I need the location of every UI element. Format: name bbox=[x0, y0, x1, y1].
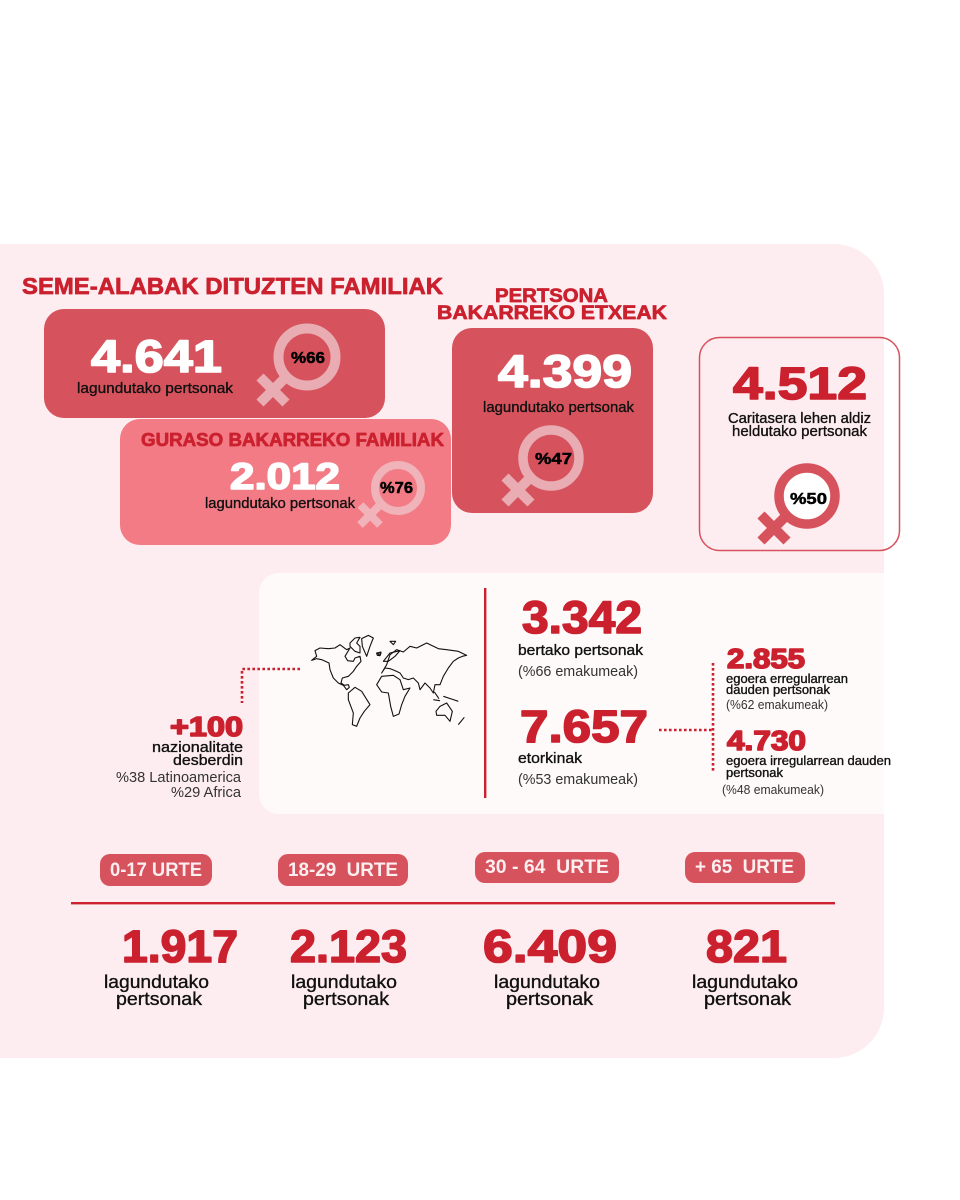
text block: irregular situation: 4.730 bbox=[727, 725, 806, 756]
text block: regular situation bbox=[726, 643, 848, 712]
number: 4.399: 4.399 bbox=[498, 346, 632, 397]
number: 2.012: 2.012 bbox=[230, 456, 340, 497]
label: lagundutako pertsonak: lagundutako pertsonak bbox=[77, 380, 234, 397]
text block: nationalities: %38 Latinoamerica bbox=[116, 769, 242, 786]
column: age 30-64: lagundutako bbox=[494, 972, 600, 992]
label: lagundutako pertsonak: lagundutako pertsonak bbox=[205, 495, 355, 512]
label: lagundutako pertsonak: lagundutako pertsonak bbox=[483, 399, 634, 416]
column: age 0-17: lagundutako bbox=[104, 972, 209, 992]
column: age 0-17 bbox=[100, 854, 238, 1009]
heading: pertsona bakarreko etxeak bbox=[437, 286, 667, 324]
text block: regular situation: egoera erregularrean bbox=[726, 671, 848, 686]
icon: female symbol 76 bbox=[360, 465, 421, 525]
column: age 0-17: 1.917 bbox=[122, 921, 238, 972]
panel: single person households bbox=[452, 328, 653, 513]
icon: female symbol 50 bbox=[761, 468, 835, 541]
icon: female symbol 47: %47 bbox=[535, 451, 572, 468]
text block: irregular situation bbox=[722, 725, 891, 797]
text block: local people: 3.342 bbox=[522, 592, 642, 643]
divider: age rule bbox=[71, 902, 835, 904]
text block: regular situation: 2.855 bbox=[727, 643, 805, 674]
column: age 30-64 bbox=[475, 852, 619, 1009]
column: age 18-29: lagundutako bbox=[291, 972, 397, 992]
column: age 18-29: pertsonak bbox=[303, 989, 390, 1009]
panel: main background bbox=[0, 244, 884, 1058]
column: age 65+: + 65 URTE bbox=[695, 857, 794, 878]
text block: nationalities bbox=[116, 711, 243, 801]
arrow: dotted connector to migrant status bbox=[659, 663, 713, 773]
column: age 65+ bbox=[685, 852, 805, 1009]
number: 4.641: 4.641 bbox=[91, 331, 222, 382]
divider: vertical origin line bbox=[484, 588, 486, 798]
panel: families with children bbox=[44, 309, 385, 418]
heading: guraso bakarreko familiak: GURASO BAKARREKO FAMILIAK bbox=[141, 430, 444, 450]
text block: local people: (%66 emakumeak) bbox=[518, 663, 638, 680]
text block: migrants bbox=[518, 701, 648, 788]
text block: regular situation: (%62 emakumeak) bbox=[726, 697, 828, 712]
label: caritasera lehen aldiz: Caritasera lehen aldiz bbox=[728, 410, 871, 427]
panel: single parent families bbox=[120, 419, 451, 545]
column: age 30-64: 6.409 bbox=[483, 921, 617, 972]
heading: pertsona bakarreko etxeak: BAKARREKO ETXEAK bbox=[437, 303, 667, 324]
column: age 18-29 bbox=[278, 854, 408, 1009]
text block: migrants: (%53 emakumeak) bbox=[518, 771, 638, 788]
text block: local people bbox=[518, 592, 644, 680]
text block: nationalities: desberdin bbox=[173, 752, 243, 769]
text block: nationalities: %29 Africa bbox=[171, 784, 242, 801]
column: age 18-29: 18-29 URTE bbox=[288, 860, 398, 881]
panel: first time arrivals bbox=[700, 338, 900, 550]
column: age 65+: pertsonak bbox=[704, 989, 792, 1009]
column: age 30-64: 30 - 64 URTE bbox=[485, 857, 609, 878]
column: age 0-17: 0-17 URTE bbox=[110, 860, 202, 881]
icon: female symbol 47 bbox=[505, 430, 579, 503]
text block: nationalities: +100 bbox=[170, 711, 243, 742]
heading: seme-alabak dituzten familiak: SEME-ALABAK DITUZTEN FAMILIAK bbox=[22, 273, 443, 299]
column: age 18-29: 2.123 bbox=[290, 921, 407, 972]
icon: world map bbox=[312, 635, 467, 726]
label: caritasera lehen aldiz bbox=[728, 410, 871, 440]
column: age 30-64: pertsonak bbox=[506, 989, 594, 1009]
text block: migrants: 7.657 bbox=[520, 701, 648, 752]
label: caritasera lehen aldiz: heldutako pertsonak bbox=[732, 423, 867, 440]
text block: migrants: etorkinak bbox=[518, 750, 583, 767]
panel: origin bbox=[259, 573, 884, 814]
column: age 65+: 821 bbox=[706, 921, 787, 972]
icon: female symbol 66: %66 bbox=[291, 350, 325, 367]
icon: female symbol 50: %50 bbox=[790, 491, 827, 508]
text block: regular situation: dauden pertsonak bbox=[726, 682, 830, 697]
column: age 0-17: pertsonak bbox=[116, 989, 203, 1009]
column: age 65+: lagundutako bbox=[692, 972, 798, 992]
text block: irregular situation: pertsonak bbox=[726, 765, 783, 780]
icon: female symbol 66 bbox=[260, 328, 336, 403]
arrow: dotted connector to map bbox=[242, 669, 300, 703]
text block: local people: bertako pertsonak bbox=[518, 642, 644, 659]
text block: nationalities: nazionalitate bbox=[152, 739, 243, 756]
text block: irregular situation: egoera irregularrean dauden bbox=[726, 753, 891, 768]
text block: irregular situation: (%48 emakumeak) bbox=[722, 782, 824, 797]
icon: female symbol 76: %76 bbox=[380, 480, 413, 497]
number: 4.512: 4.512 bbox=[733, 358, 867, 409]
heading: pertsona bakarreko etxeak: PERTSONA bbox=[495, 286, 608, 307]
